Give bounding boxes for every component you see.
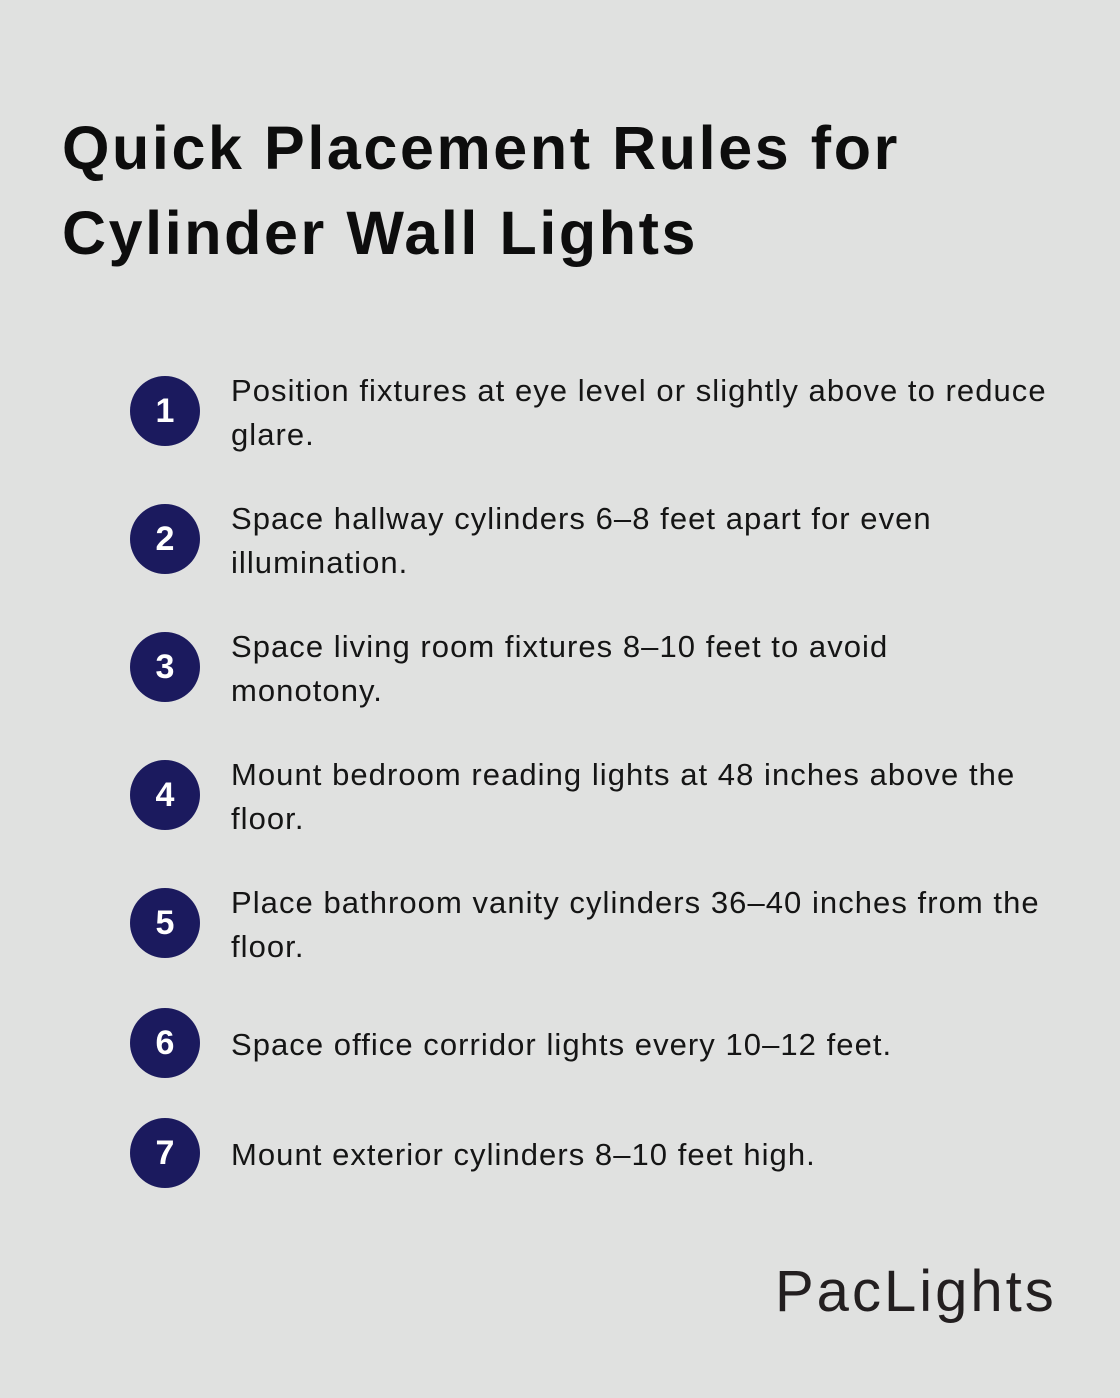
item 7 [130,1118,816,1188]
item 2: illumination. [231,544,408,580]
item 5: floor. [231,928,305,964]
item 5: 5 [156,904,174,942]
item 5 [130,884,1040,964]
item 2: 2 [156,520,174,558]
title [62,114,900,267]
item 4: Mount bedroom reading lights at 48 inches above the [231,756,1015,792]
item 3: 3 [156,648,174,686]
item 1: 1 [156,392,174,430]
title: Quick Placement Rules for [62,114,900,182]
item 1: glare. [231,416,315,452]
item 3 [130,628,888,708]
item 1 [130,372,1047,452]
item 2: Space hallway cylinders 6–8 feet apart for even [231,500,932,536]
item 3: Space living room fixtures 8–10 feet to avoid [231,628,888,664]
item 2 [130,500,932,580]
title: Cylinder Wall Lights [62,199,698,267]
item 4 [130,756,1015,836]
item 7: Mount exterior cylinders 8–10 feet high. [231,1136,816,1172]
item 6 [130,1008,892,1078]
item 4: floor. [231,800,305,836]
item 3: monotony. [231,672,383,708]
item 1: Position fixtures at eye level or slightly above to reduce [231,372,1047,408]
item 6: Space office corridor lights every 10–12 feet. [231,1026,892,1062]
item 6: 6 [156,1024,174,1062]
item 5: Place bathroom vanity cylinders 36–40 inches from the [231,884,1040,920]
logo: PacLights [775,1259,1057,1324]
item 7: 7 [156,1134,174,1172]
item 4: 4 [156,776,174,814]
